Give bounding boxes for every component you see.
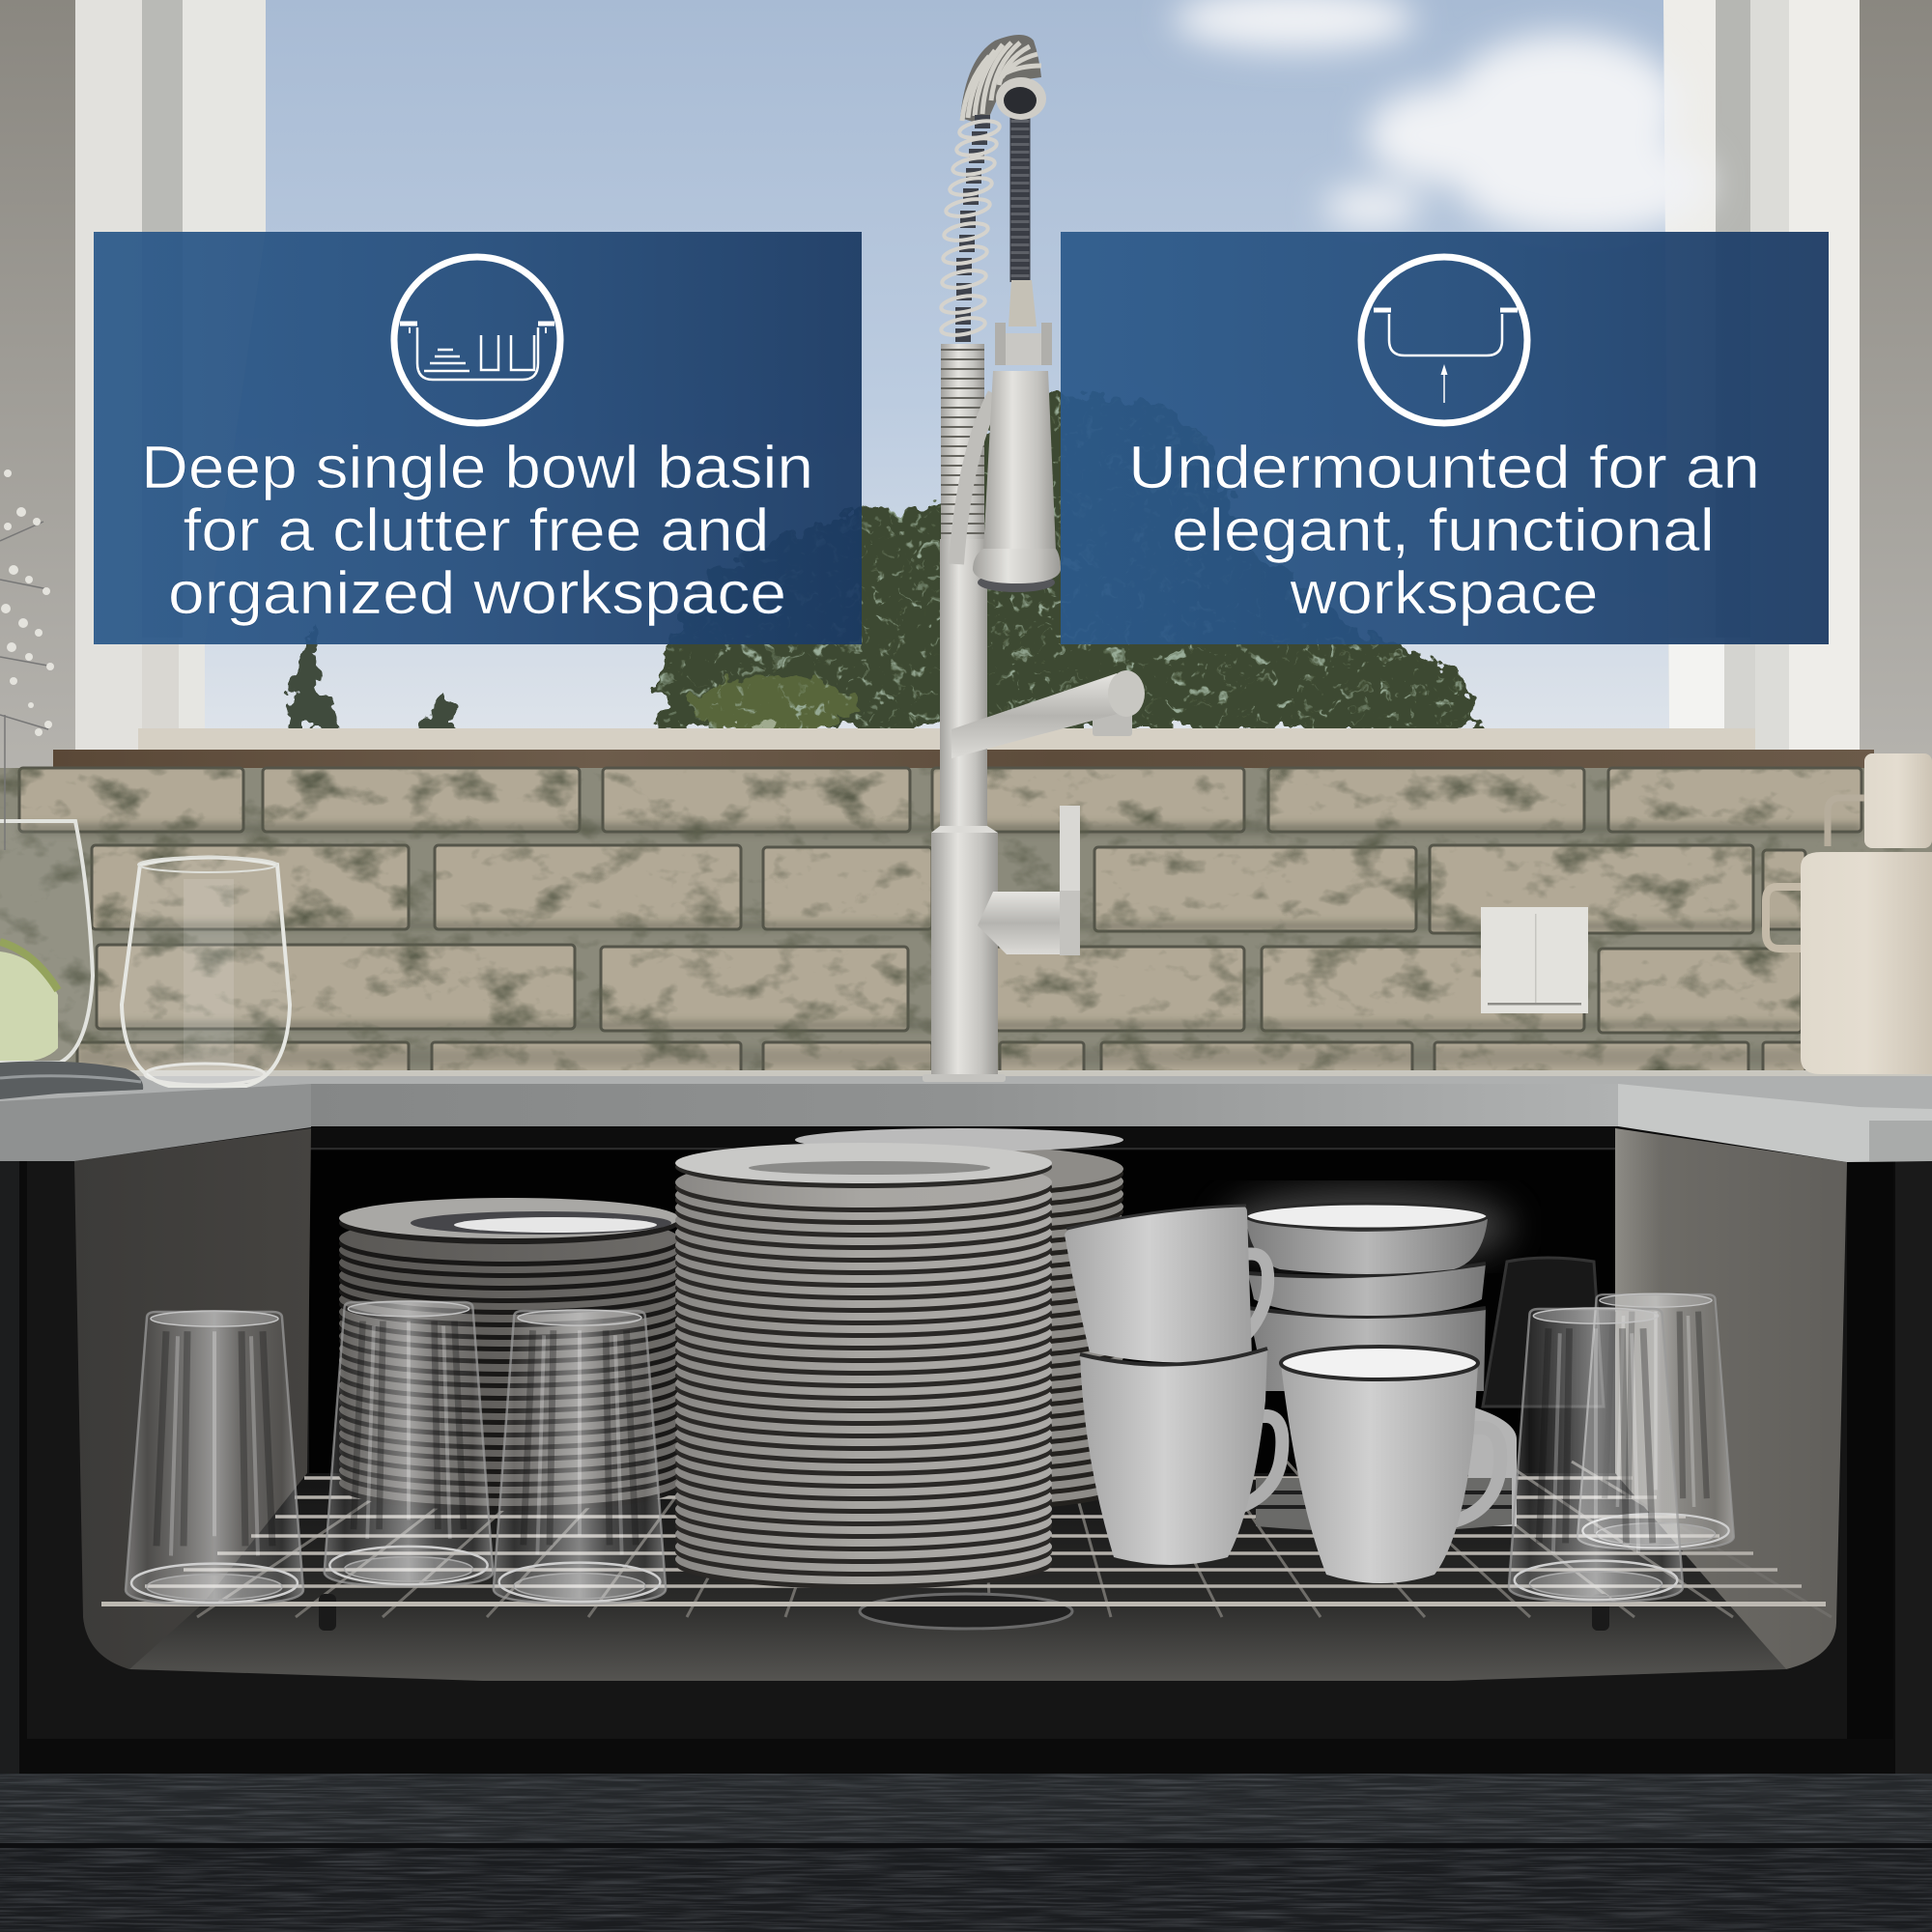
faucet lower spring sleeve [941, 344, 984, 539]
faucet sprayer head [973, 549, 1061, 592]
sink right wall [1615, 1128, 1847, 1669]
faucet pull-down hose [1010, 97, 1030, 282]
flower sprigs [0, 469, 54, 850]
left glass two [325, 1301, 493, 1586]
cabinet base [0, 1774, 1932, 1932]
left stack of plates [339, 1198, 679, 1511]
left glass three [494, 1310, 666, 1604]
heading: undermounted text: Undermounted for an [1128, 435, 1760, 501]
left glass one [126, 1311, 303, 1605]
faucet coil spine segments [955, 115, 990, 342]
front mug [1281, 1347, 1500, 1583]
panel: deep single bowl basin [94, 232, 862, 644]
sink cabinet black surround [0, 1082, 1932, 1775]
faucet spout [952, 670, 1145, 758]
faucet sprayer body [983, 371, 1056, 551]
faucet ring opening [1004, 87, 1037, 114]
faucet lever handle [978, 806, 1080, 955]
faucet sprayer collar [995, 323, 1052, 365]
drinking glass on counter with lime [0, 821, 93, 1063]
ceramic canisters on the right [1766, 753, 1932, 1074]
sink back wall [309, 1125, 1618, 1492]
sink left wall [74, 1128, 311, 1669]
stemless glass on counter [122, 857, 290, 1086]
background wall and window frame [0, 0, 1932, 773]
rear right glass [1577, 1293, 1734, 1549]
small plates behind front mug [1256, 1406, 1517, 1532]
icon: undermount sink with arrow [1361, 257, 1527, 423]
countertop [0, 1070, 1932, 1162]
heading: deep bowl text [141, 435, 813, 627]
heading: deep bowl text: Deep single bowl basin [141, 435, 813, 501]
faucet spring coil [940, 118, 1001, 338]
back stack of plates [795, 1128, 1123, 1511]
dark glass at back [1483, 1258, 1604, 1406]
towel [0, 1061, 143, 1099]
window sill and wood ledge [53, 728, 1874, 768]
sink floor [129, 1473, 1786, 1681]
faucet sprayer holder arm [956, 394, 995, 564]
window sky [205, 0, 1669, 730]
lower left mug [1080, 1349, 1282, 1565]
faucet base [923, 826, 1006, 1082]
faucet stem [940, 539, 987, 831]
heading: undermounted text: elegant, functional [1172, 497, 1715, 564]
faucet sprayer neck [1009, 280, 1037, 327]
faucet hose ring [996, 77, 1046, 120]
faucet dome fins [960, 35, 1041, 126]
heading: undermounted text [1128, 435, 1760, 627]
heading: undermounted text: workspace [1289, 560, 1598, 627]
wall switch [1481, 907, 1588, 1013]
front right glass [1509, 1308, 1683, 1602]
heading: deep bowl text: organized workspace [168, 560, 786, 627]
wire sink grid [101, 1462, 1832, 1631]
trees outside the window [286, 386, 1507, 734]
clouds [1174, 0, 1710, 237]
central stack of plates [675, 1143, 1052, 1589]
stacked bowls with glow [1222, 1188, 1512, 1391]
panel: undermounted [1061, 232, 1829, 644]
faucet [923, 35, 1145, 1082]
icon: sink with dishes [394, 257, 560, 423]
brick backsplash [0, 768, 1932, 1082]
top stacked mug [1065, 1206, 1268, 1362]
heading: deep bowl text: for a clutter free and [184, 497, 769, 564]
